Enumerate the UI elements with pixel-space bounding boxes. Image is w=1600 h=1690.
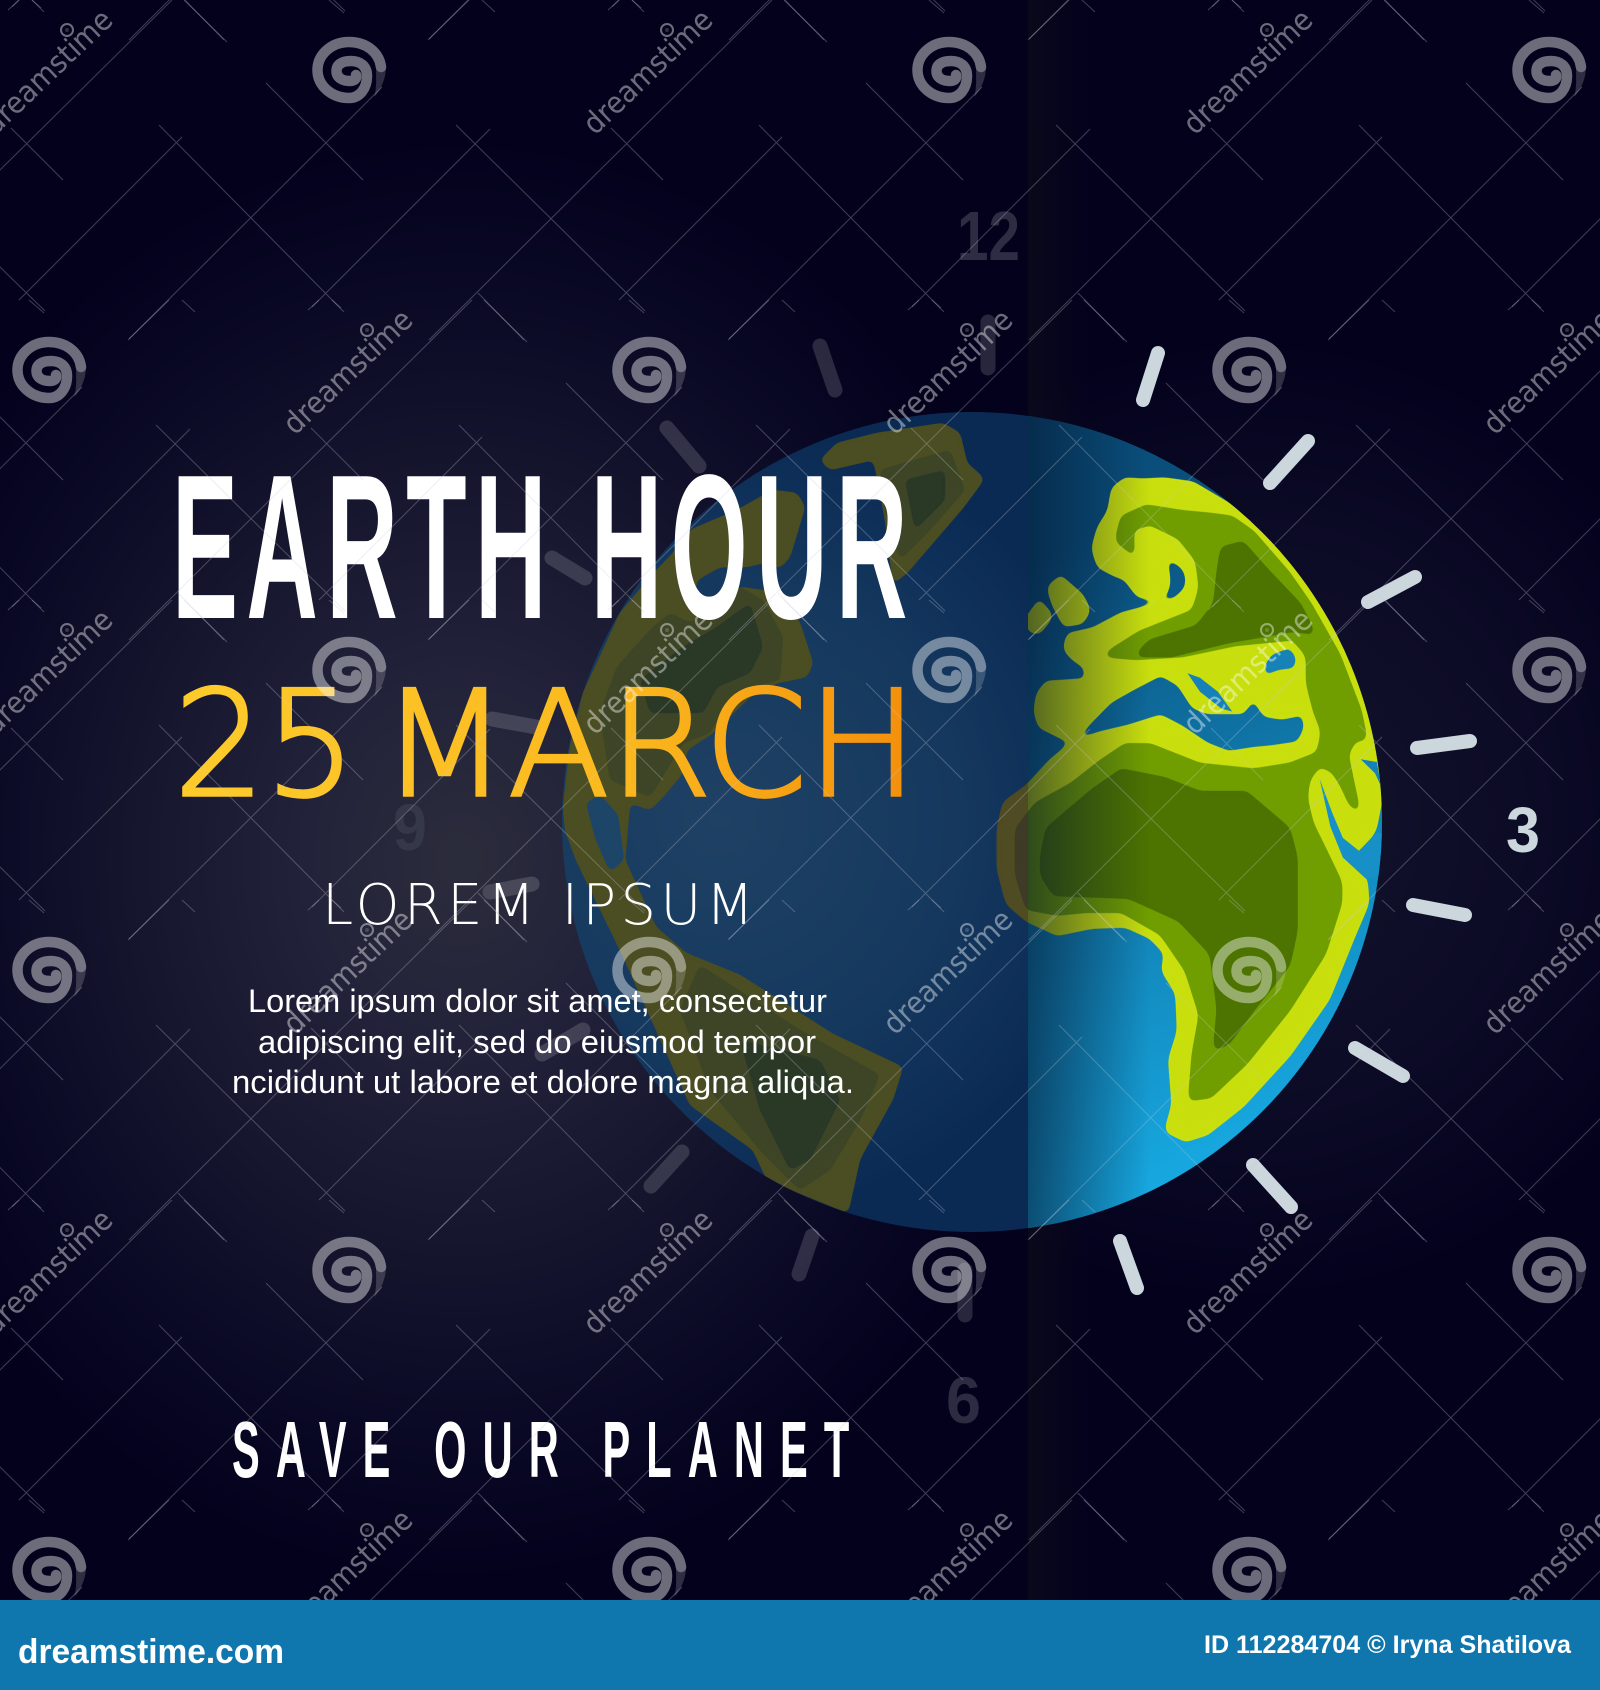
watermark crosshatch lines and logos: dreamstime xyxy=(876,903,1020,1042)
watermark crosshatch lines and logos: dreamstime xyxy=(1176,1203,1320,1342)
watermark crosshatch lines and logos: dreamstime xyxy=(276,1503,420,1642)
clock ticks: bright right side xyxy=(1120,353,1470,1288)
watermark crosshatch lines and logos: dreamstime xyxy=(876,1503,1020,1642)
clock numerals: 9 xyxy=(393,790,427,864)
subheading: LOREM IPSUM: LOREM IPSUM xyxy=(322,873,754,938)
body paragraph xyxy=(232,983,854,1100)
footer image credit: ID 112284704 © Iryna Shatilova xyxy=(1204,1631,1572,1659)
watermark crosshatch lines and logos: dreamstime xyxy=(576,1203,720,1342)
watermark crosshatch lines and logos: dreamstime xyxy=(276,303,420,442)
globe: lit right half with Africa and Eurasia xyxy=(1028,416,1382,1228)
clock numerals: 6 xyxy=(946,1363,981,1437)
clock numerals: 12 xyxy=(957,197,1020,275)
clock ticks: dim left side xyxy=(490,322,988,1315)
globe xyxy=(550,400,1414,1250)
continent darkest tones xyxy=(640,470,945,1170)
watermark crosshatch lines and logos: dreamstime xyxy=(276,903,420,1042)
watermark crosshatch lines and logos: dreamstime xyxy=(1176,603,1320,742)
footer site name: dreamstime.com xyxy=(18,1633,284,1671)
body paragraph: ncididunt ut labore et dolore magna aliqua. xyxy=(232,1064,854,1100)
footer banner xyxy=(0,1600,1600,1690)
watermark crosshatch lines and logos: dreamstime xyxy=(876,303,1020,442)
body paragraph: adipiscing elit, sed do eiusmod tempor xyxy=(258,1024,816,1060)
continent inner tones xyxy=(600,450,965,1190)
title: EARTH HOUR: EARTH HOUR xyxy=(172,433,907,663)
date: 25 MARCH: 25 xyxy=(174,660,356,830)
North and South America outline xyxy=(563,490,903,1213)
Greenland xyxy=(820,423,983,584)
date: 25 MARCH: MARCH xyxy=(381,660,918,830)
tagline: SAVE OUR PLANET: SAVE OUR PLANET xyxy=(232,1404,849,1495)
Gulf of Mexico xyxy=(586,795,624,872)
clock numerals xyxy=(393,197,1540,1437)
globe: dimmed left half with the Americas xyxy=(562,412,1028,1232)
clock numerals: 3 xyxy=(1506,794,1540,866)
body paragraph: Lorem ipsum dolor sit amet, consectetur xyxy=(248,983,827,1019)
watermark crosshatch lines and logos: dreamstime xyxy=(576,603,720,742)
